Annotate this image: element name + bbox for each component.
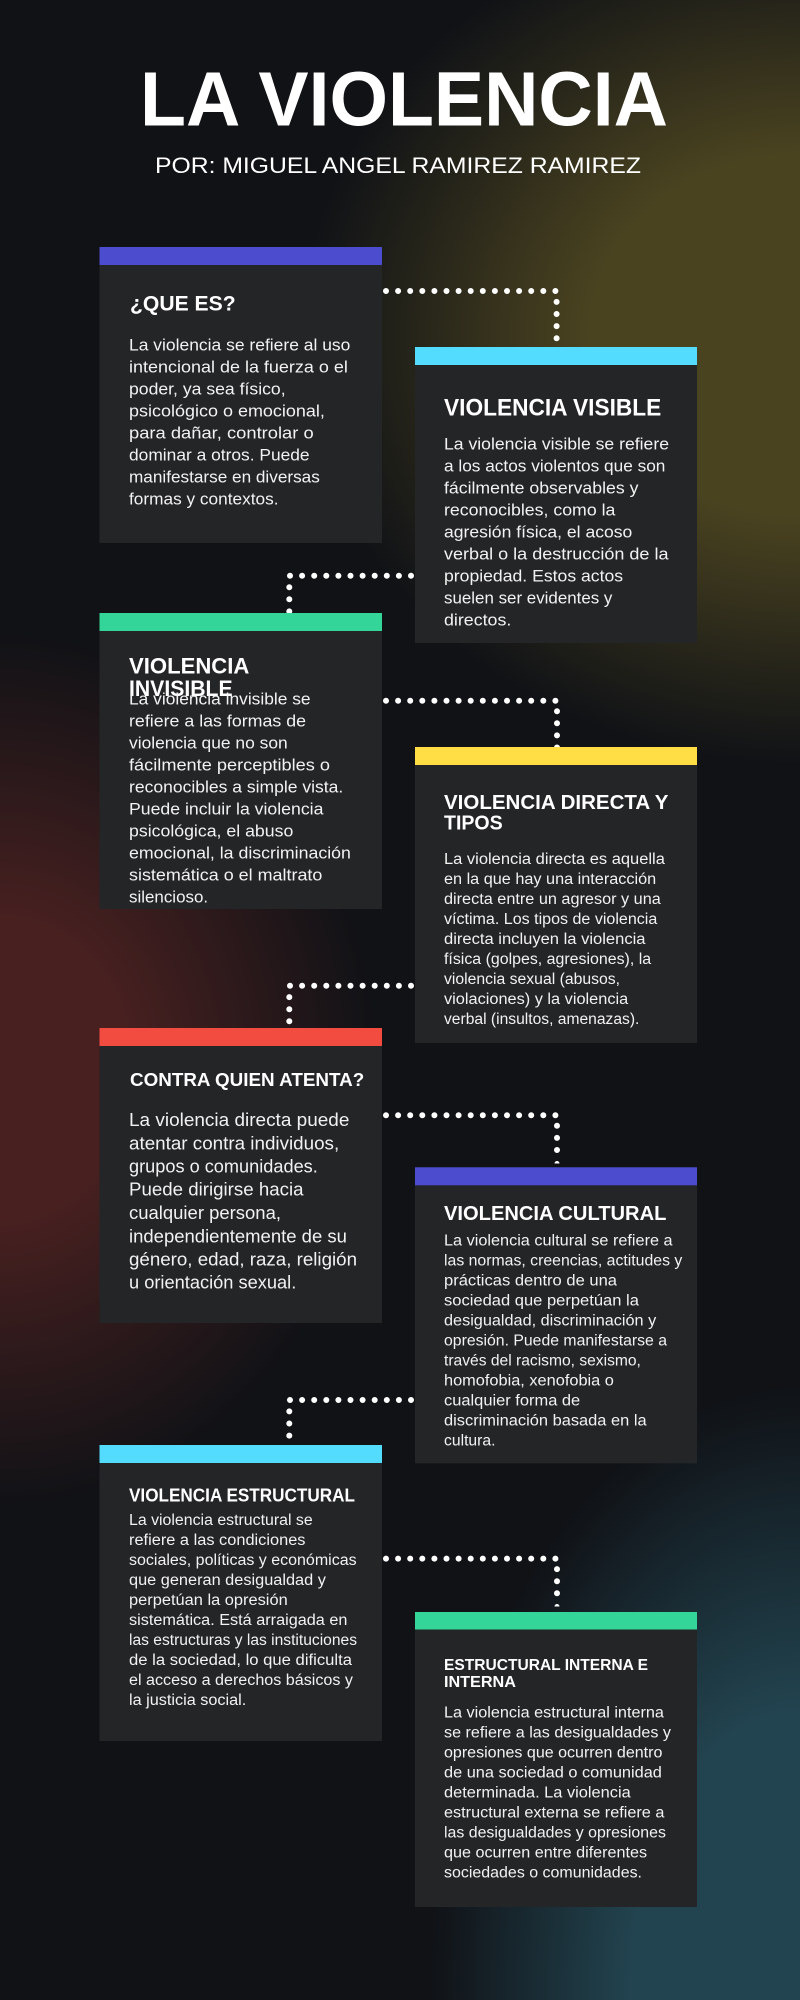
colour bar: purple [100,247,382,265]
body text: violaciones) y la violencia [444,991,629,1008]
body text: u orientación sexual. [129,1273,296,1293]
body text: sociedad que perpetúan la [444,1292,639,1309]
heading: TIPOS [444,812,503,835]
body text [129,1110,357,1293]
body text: violencia sexual (abusos, [444,971,620,988]
body text: verbal o la destrucción de la [444,544,669,564]
body text: cualquier persona, [129,1203,281,1223]
body text [444,851,665,1028]
colour bar: indigo [415,1167,697,1185]
heading: VIOLENCIA VISIBLE [444,394,661,421]
body text [129,336,350,509]
body text: refiere a las formas de [129,711,306,730]
body text: dominar a otros. Puede [129,446,310,465]
body text: refiere a las condiciones [129,1532,306,1549]
body text: cualquier forma de [444,1392,580,1409]
body text: cultura. [444,1432,496,1449]
heading: INTERNA [444,1674,516,1691]
body text: propiedad. Estos actos [444,566,623,586]
colour bar: cyan [415,347,697,365]
colour bar: green [415,1612,697,1630]
body text: La violencia se refiere al uso [129,336,350,355]
body text: manifestarse en diversas [129,468,320,487]
panel: violencia invisible [100,613,382,909]
body text: física (golpes, agresiones), la [444,951,651,968]
heading: VIOLENCIA [129,654,250,679]
body text: de una sociedad o comunidad [444,1764,662,1782]
heading [129,654,250,701]
connector: directa to contra quien [289,986,411,1035]
body text: verbal (insultos, amenazas). [444,1011,639,1028]
body text: psicológica, el abuso [129,821,293,840]
body text: directos. [444,610,511,630]
body text: homofobia, xenofobia o [444,1372,614,1389]
heading [444,1657,648,1691]
body text: de la sociedad, lo que dificulta [129,1652,352,1669]
body text [129,1512,357,1709]
heading [444,791,669,835]
body text: formas y contextos. [129,490,278,509]
body text: La violencia directa es aquella [444,851,665,868]
body text: fácilmente perceptibles o [129,755,330,774]
panel: estructural interna e interna [415,1612,697,1907]
body text: para dañar, controlar o [129,424,314,443]
colour bar: cyan [100,1445,382,1463]
body text: intencional de la fuerza o el [129,358,348,377]
connector: cultural to estructural [289,1400,411,1440]
body text: Puede incluir la violencia [129,799,324,818]
body text: sociedades o comunidades. [444,1864,642,1882]
body text: La violencia estructural interna [444,1704,664,1722]
title: LA VIOLENCIA [140,56,668,142]
body text: el acceso a derechos básicos y [129,1672,353,1689]
body text: Puede dirigirse hacia [129,1180,305,1200]
body text: través del racismo, sexismo, [444,1352,641,1369]
subtitle: author: POR: MIGUEL ANGEL RAMIREZ RAMIREZ [155,153,641,178]
body text: poder, ya sea físico, [129,380,286,399]
body text: en la que hay una interacción [444,871,656,888]
heading: CONTRA QUIEN ATENTA? [130,1069,364,1090]
body text: perpetúan la opresión [129,1592,288,1609]
body text: fácilmente observables y [444,478,639,498]
body text: La violencia estructural se [129,1512,313,1529]
body text: opresión. Puede manifestarse a [444,1332,667,1349]
connector: visible to invisible [289,576,411,620]
panel: violencia directa y tipos [415,747,697,1043]
heading: ESTRUCTURAL INTERNA E [444,1657,648,1674]
heading: VIOLENCIA ESTRUCTURAL [129,1484,355,1505]
body text: que ocurren entre diferentes [444,1844,647,1862]
colour bar: red [100,1028,382,1046]
body text: La violencia directa puede [129,1110,349,1130]
body text: la justicia social. [129,1692,246,1709]
panel: violencia cultural [415,1167,697,1463]
connector: que es to visible [386,291,557,345]
heading: VIOLENCIA DIRECTA Y [444,791,669,814]
body text [444,1232,683,1449]
connector: contra quien to cultural [386,1115,560,1164]
body text: silencioso. [129,887,208,906]
body text: sociales, políticas y económicas [129,1552,357,1569]
body text: independientemente de su [129,1226,347,1246]
panel: violencia visible [415,347,697,643]
body text [444,1704,671,1882]
body text: directa incluyen la violencia [444,931,646,948]
body text: opresiones que ocurren dentro [444,1744,662,1762]
body text: directa entre un agresor y una [444,891,661,908]
body text: grupos o comunidades. [129,1156,318,1176]
body text: La violencia cultural se refiere a [444,1232,673,1249]
connector: invisible to directa [386,701,557,755]
body text [129,689,351,906]
body text: atentar contra individuos, [129,1133,339,1153]
body text: víctima. Los tipos de violencia [444,911,658,928]
body text: determinada. La violencia [444,1784,631,1802]
body text: prácticas dentro de una [444,1272,617,1289]
body text: estructural externa se refiere a [444,1804,665,1822]
body text: emocional, la discriminación [129,843,351,862]
panel: contra quien atenta [100,1028,382,1323]
body text: reconocibles a simple vista. [129,777,343,796]
body text: suelen ser evidentes y [444,588,613,608]
body text: discriminación basada en la [444,1412,647,1429]
panel: que es [100,247,382,543]
colour bar: green [100,613,382,631]
body text: sistemática. Está arraigada en [129,1612,347,1629]
body text: que generan desigualdad y [129,1572,326,1589]
body text: género, edad, raza, religión [129,1249,357,1269]
body text [444,434,669,630]
heading: ¿QUE ES? [130,293,236,316]
heading: INVISIBLE [129,676,233,701]
body text: violencia que no son [129,733,288,752]
connector: estructural to interna [386,1559,560,1606]
body text: agresión física, el acoso [444,522,632,542]
body text: se refiere a las desigualdades y [444,1724,671,1742]
body text: desigualdad, discriminación y [444,1312,656,1329]
body text: reconocibles, como la [444,500,616,520]
body text: sistemática o el maltrato [129,865,322,884]
body text: las desigualdades y opresiones [444,1824,666,1842]
body text: La violencia invisible se [129,689,311,708]
panel: violencia estructural [100,1445,382,1741]
body text: a los actos violentos que son [444,456,665,476]
body text: psicológico o emocional, [129,402,325,421]
colour bar: yellow [415,747,697,765]
body text: las normas, creencias, actitudes y [444,1252,683,1269]
heading: VIOLENCIA CULTURAL [444,1202,666,1225]
body text: las estructuras y las instituciones [129,1632,357,1649]
body text: La violencia visible se refiere [444,434,669,454]
